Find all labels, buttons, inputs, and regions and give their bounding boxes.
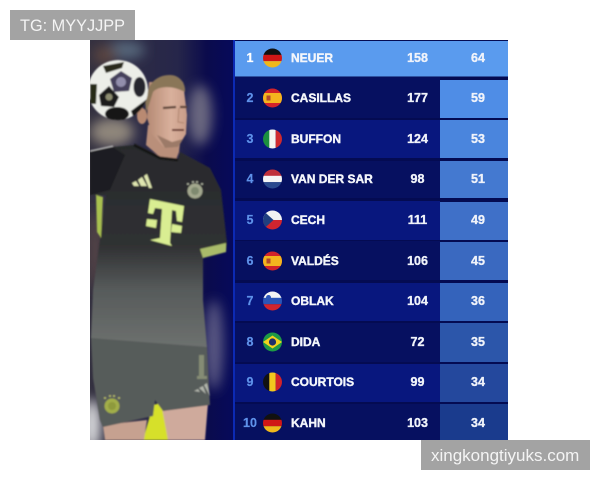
shirt lime trim [200,243,226,258]
table background [235,40,508,440]
collar [134,145,178,160]
row 1: Neuer: NEUER [291,51,333,65]
row 10: Kahn: 34 [471,416,485,430]
row 7: Oblak [235,283,508,321]
yellow background patch [143,402,168,440]
row 10: Kahn: KAHN [291,416,326,430]
row 10: Kahn: 10 [243,416,257,430]
row 4: Van der Sar: VAN DER SAR [291,172,373,186]
row 9: Courtois: 99 [411,375,424,389]
legs [103,403,208,440]
row 5: Cech: 111 [408,213,427,227]
row 4: Van der Sar: 51 [471,172,485,186]
T logo [146,199,184,246]
stubble [157,135,183,148]
row 5: Cech: 49 [471,213,485,227]
row 6: Valdés: 45 [471,254,485,268]
row 3: Buffon: 53 [471,132,485,146]
shorts logo [194,383,210,396]
row 6: Valdés: VALDÉS [291,253,339,268]
adidas logo [132,174,152,188]
row 10: Kahn [235,404,508,440]
head [147,82,187,148]
row 1: Neuer: 158 [407,51,428,65]
row 4: Van der Sar: 4 [247,172,254,186]
watermark: top left [10,10,135,40]
row 5: Cech: 5 [247,213,254,227]
face features [163,107,187,108]
row 8: Dida: 72 [411,335,424,349]
row 6: Valdés [235,241,508,280]
row 7: Oblak: 7 [247,294,254,308]
row 9: Courtois: 34 [471,375,485,389]
row 2: Casillas: 2 [247,91,254,105]
photo: goalkeeper with ball [83,40,236,451]
ball [88,60,148,121]
row 7: Oblak: 36 [471,294,485,308]
row 4: Van der Sar [235,161,508,198]
shorts [91,336,210,427]
ear [137,108,147,124]
row 6: Valdés: 106 [407,254,428,268]
row 8: Dida: 8 [247,335,254,349]
watermark: top left: TG: MYYJJPP [20,17,125,35]
sleeve trim [90,146,113,151]
row 7: Oblak: OBLAK [291,294,334,308]
row 5: Cech [235,201,508,240]
row 2: Casillas [235,77,508,118]
row 7: Oblak: 104 [407,294,428,308]
row 9: Courtois [235,364,508,402]
row 8: Dida [235,323,508,362]
row 8: Dida: DIDA [291,335,321,349]
shorts badge [104,396,120,414]
row 3: Buffon: 124 [407,132,428,146]
watermark: bottom right [421,440,590,470]
row 3: Buffon [235,120,508,158]
row 6: Valdés: 6 [247,254,254,268]
hair [146,75,185,112]
row 9: Courtois: COURTOIS [291,375,354,389]
club badge [187,182,203,198]
row 1: Neuer: 64 [471,51,485,65]
row 1: Neuer: 1 [247,51,254,65]
row 2: Casillas: 59 [471,91,485,105]
shirt [90,145,227,347]
sleeve shadow [90,147,125,195]
row 5: Cech: CECH [291,213,325,227]
row 3: Buffon: 3 [247,132,254,146]
neck [146,125,182,160]
row 1: Neuer [235,41,508,76]
watermark: bottom right: xingkongtiyuks.com [431,446,579,465]
row 10: Kahn: 103 [407,416,428,430]
row 9: Courtois: 9 [247,375,254,389]
shorts number [197,355,207,379]
row 3: Buffon: BUFFON [291,132,341,146]
row 2: Casillas: CASILLAS [291,91,351,105]
row 8: Dida: 35 [471,335,485,349]
row 2: Casillas: 177 [407,91,428,105]
row 4: Van der Sar: 98 [411,172,424,186]
